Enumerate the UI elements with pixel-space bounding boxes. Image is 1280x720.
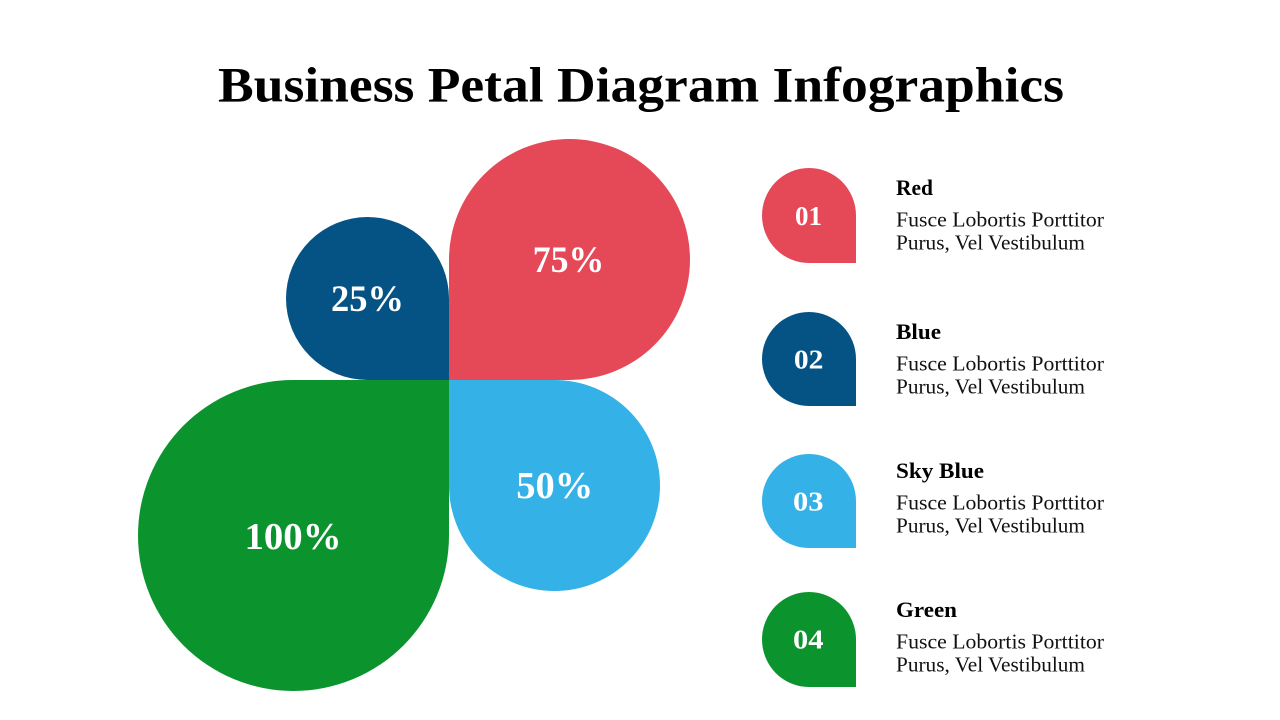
title: Business Petal Diagram Infographics [218, 56, 1064, 112]
legend item 01 [762, 168, 1104, 263]
petal: green 100%: 100% [244, 516, 342, 558]
icon: sky blue drop: 03 [793, 486, 824, 516]
label: blue: Blue [896, 319, 941, 344]
description: Fusce Lobortis Porttitor [896, 208, 1104, 232]
icon: sky blue drop [762, 454, 856, 548]
icon: green drop [762, 592, 856, 687]
description: Fusce Lobortis Porttitor [896, 352, 1104, 376]
description: Purus, Vel Vestibulum [896, 514, 1085, 538]
description: Purus, Vel Vestibulum [896, 231, 1085, 255]
petal: blue 25%: 25% [331, 279, 404, 320]
petal diagram [138, 139, 690, 691]
label: sky blue: Sky Blue [896, 458, 984, 483]
label: green: Green [896, 597, 957, 622]
description: Fusce Lobortis Porttitor [896, 491, 1104, 515]
icon: blue drop [762, 312, 856, 406]
petal: green 100% [138, 380, 449, 691]
description: Purus, Vel Vestibulum [896, 375, 1085, 399]
icon: red drop: 01 [795, 201, 822, 231]
description: Purus, Vel Vestibulum [896, 653, 1085, 677]
petal: sky blue 50%: 50% [516, 465, 593, 507]
label: red: Red [896, 175, 933, 200]
icon: red drop [762, 168, 856, 263]
petal: sky blue 50% [449, 380, 660, 591]
description: Fusce Lobortis Porttitor [896, 630, 1104, 654]
petal: red 75%: 75% [533, 240, 604, 281]
petal: red 75% [449, 139, 690, 380]
icon: green drop: 04 [793, 624, 824, 654]
legend item 02 [762, 312, 1104, 406]
legend item 03 [762, 454, 1104, 548]
petal: blue 25% [286, 217, 449, 380]
legend item 04 [762, 592, 1104, 687]
icon: blue drop: 02 [794, 344, 823, 374]
